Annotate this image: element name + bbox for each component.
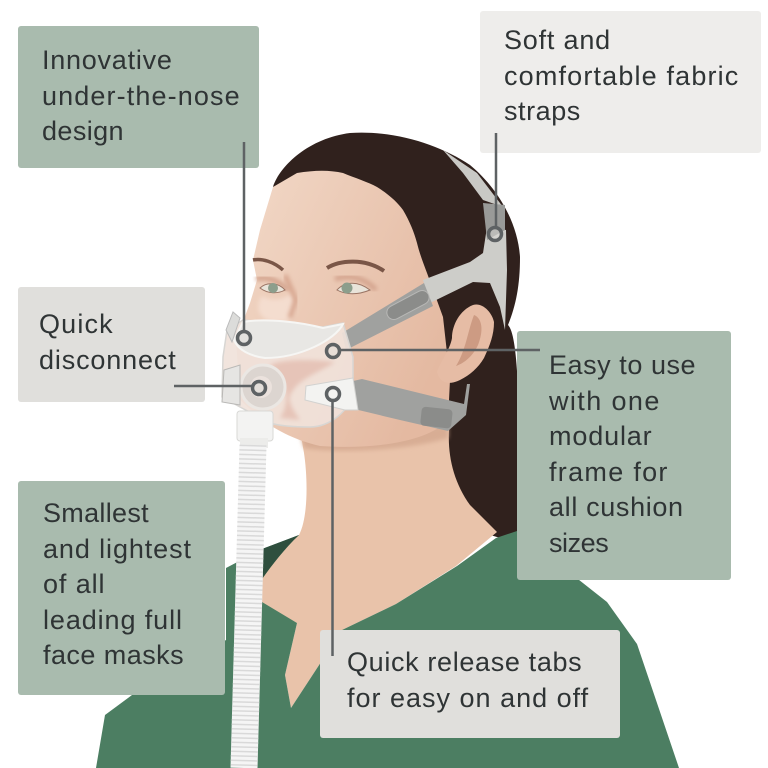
callout: smallest and lightest: of all <box>43 569 105 599</box>
callout: quick disconnect <box>18 287 205 402</box>
callout: quick release tabs <box>320 630 620 738</box>
callout: smallest and lightest: and lightest <box>43 534 192 564</box>
callout: under-the-nose design <box>18 26 259 168</box>
callout: modular frame <box>517 331 731 580</box>
callout: fabric straps <box>480 11 761 153</box>
callout: fabric straps: comfortable fabric <box>504 61 739 91</box>
neck <box>262 420 497 708</box>
callout: smallest and lightest: face masks <box>43 640 184 670</box>
callout: modular frame: frame for <box>549 457 669 487</box>
callout: fabric straps: straps <box>504 96 581 126</box>
callout: fabric straps: Soft and <box>504 25 611 55</box>
callout: under-the-nose design: design <box>42 116 124 146</box>
callout: smallest and lightest: leading full <box>43 605 183 635</box>
mask cushion and frame <box>222 312 358 427</box>
headgear straps <box>342 150 507 431</box>
callout: modular frame: sizes <box>549 528 608 558</box>
ear <box>437 304 494 383</box>
air hose <box>244 445 253 768</box>
callout: modular frame: Easy to use <box>549 350 696 380</box>
hose connector <box>237 411 273 448</box>
callout: smallest and lightest: Smallest <box>43 498 149 528</box>
callout: quick disconnect: disconnect <box>39 345 177 375</box>
callout: quick release tabs: for easy on and off <box>347 683 589 713</box>
callout: quick disconnect: Quick <box>39 309 114 339</box>
callout: modular frame: with one <box>549 386 661 416</box>
callout: modular frame: all cushion <box>549 492 684 522</box>
face <box>236 171 450 447</box>
shirt <box>96 531 679 768</box>
eyes and eyebrows <box>253 259 384 294</box>
quick release clip <box>305 378 358 410</box>
callout: modular frame: modular <box>549 421 652 451</box>
callout: smallest and lightest <box>18 481 225 695</box>
callout: quick release tabs: Quick release tabs <box>347 647 582 677</box>
hair <box>273 133 520 540</box>
callout: under-the-nose design: under-the-nose <box>42 81 241 111</box>
callout: under-the-nose design: Innovative <box>42 45 173 75</box>
